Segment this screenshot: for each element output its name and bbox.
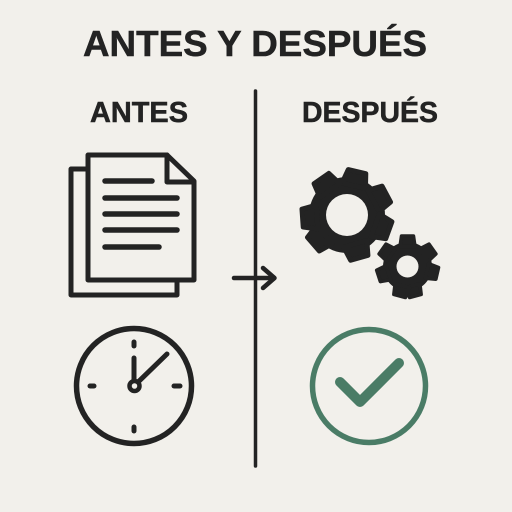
icon: small gear xyxy=(376,236,439,298)
icon: clock xyxy=(76,328,192,444)
heading: después: DESPUÉS xyxy=(302,95,438,129)
heading: antes: ANTES xyxy=(90,97,188,129)
icon: documents xyxy=(71,155,194,295)
icon: large gear xyxy=(302,169,393,261)
arrow xyxy=(234,268,274,288)
center divider xyxy=(254,91,257,466)
icon: green check in circle xyxy=(312,330,426,442)
title: ANTES Y DESPUÉS xyxy=(83,23,427,64)
